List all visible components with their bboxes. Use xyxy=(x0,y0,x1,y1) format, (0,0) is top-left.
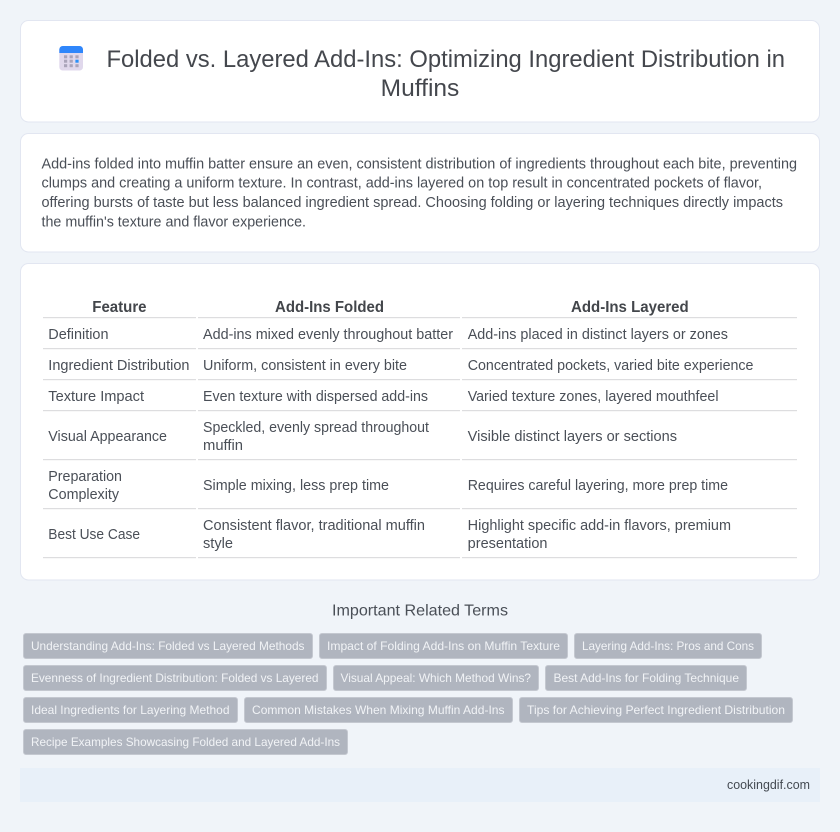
panel: comparison table xyxy=(20,264,820,580)
panel: related term tags: Layering Add-Ins: Pros and Cons xyxy=(582,639,754,653)
table row: preparation complexity: Requires careful layering, more prep time xyxy=(468,478,728,494)
table row: ingredient distribution: Ingredient Distribution xyxy=(48,358,189,374)
table row: preparation complexity: Preparation xyxy=(48,469,122,485)
table row: visual appearance: muffin xyxy=(203,438,243,454)
table row: definition: Definition xyxy=(48,327,108,343)
table row: visual appearance: Visual Appearance xyxy=(48,429,167,445)
table row: texture impact xyxy=(48,389,719,405)
panel: related term tags: Recipe Examples Showcasing Folded and Layered Add-Ins xyxy=(31,735,340,749)
table header row: Add-Ins Folded xyxy=(275,299,384,316)
table row: best use case: Highlight specific add-in flavors, premium xyxy=(468,518,731,534)
table row: ingredient distribution: Uniform, consistent in every bite xyxy=(203,358,407,374)
table row: definition: Add-ins placed in distinct layers or zones xyxy=(468,327,728,343)
title xyxy=(106,46,785,102)
table row: preparation complexity: Complexity xyxy=(48,487,120,503)
footer bar: cookingdif.com xyxy=(727,777,810,792)
table row: best use case: style xyxy=(203,536,233,552)
table row: best use case xyxy=(48,518,731,552)
text block: summary: Add-ins folded into muffin batter ensure an even, consistent distribution of ingredients throughout each bite, preventing xyxy=(42,156,797,172)
table row: texture impact: Texture Impact xyxy=(48,389,144,405)
table row: definition: Add-ins mixed evenly throughout batter xyxy=(203,327,453,343)
table row: definition xyxy=(48,327,728,343)
panel: related term tags xyxy=(24,634,792,754)
table row: best use case: Consistent flavor, traditional muffin xyxy=(203,518,425,534)
panel: summary paragraph xyxy=(20,134,820,252)
panel: related term tags: Evenness of Ingredient Distribution: Folded vs Layered xyxy=(31,671,318,685)
table row: visual appearance: Visible distinct layers or sections xyxy=(468,429,677,445)
table row: best use case: presentation xyxy=(468,536,548,552)
heading: important related terms: Important Related Terms xyxy=(332,603,508,620)
text block: summary: clumps and creating a uniform texture. In contrast, add-ins layered on top result in concentrated pockets of flavor, xyxy=(42,176,762,192)
panel: related term tags: Visual Appeal: Which Method Wins? xyxy=(340,671,531,685)
title: Muffins xyxy=(381,75,459,102)
title: Folded vs. Layered Add-Ins: Optimizing Ingredient Distribution in xyxy=(106,46,785,73)
icon: calendar xyxy=(59,46,83,70)
table row: ingredient distribution xyxy=(48,358,754,374)
table row: texture impact: Even texture with dispersed add-ins xyxy=(203,389,428,405)
table header row xyxy=(92,299,689,316)
text block: summary: the muffin's texture and flavor experience. xyxy=(42,214,306,230)
table row: preparation complexity xyxy=(48,469,728,503)
panel: related term tags: Ideal Ingredients for Layering Method xyxy=(31,703,230,717)
panel: title header xyxy=(20,20,820,122)
table row: visual appearance: Speckled, evenly spread throughout xyxy=(203,420,429,436)
footer bar xyxy=(20,768,820,802)
text block: summary xyxy=(42,156,797,230)
table row: visual appearance xyxy=(48,420,677,454)
panel: related term tags: Understanding Add-Ins: Folded vs Layered Methods xyxy=(31,639,304,653)
table row: texture impact: Varied texture zones, layered mouthfeel xyxy=(468,389,718,405)
panel: related term tags: Tips for Achieving Perfect Ingredient Distribution xyxy=(527,703,785,717)
table row: ingredient distribution: Concentrated pockets, varied bite experience xyxy=(468,358,754,374)
panel: related term tags: Common Mistakes When Mixing Muffin Add-Ins xyxy=(252,703,504,717)
panel: related term tags: Best Add-Ins for Folding Technique xyxy=(554,671,739,685)
table header row: Feature xyxy=(92,299,147,316)
table row: preparation complexity: Simple mixing, less prep time xyxy=(203,478,389,494)
table row: best use case: Best Use Case xyxy=(48,527,140,543)
table header row: Add-Ins Layered xyxy=(571,299,689,316)
text block: summary: offering bursts of taste but less balanced ingredient spread. Choosing folding or layering techniques directly impacts xyxy=(42,195,783,211)
panel: related term tags: Impact of Folding Add-Ins on Muffin Texture xyxy=(327,639,560,653)
